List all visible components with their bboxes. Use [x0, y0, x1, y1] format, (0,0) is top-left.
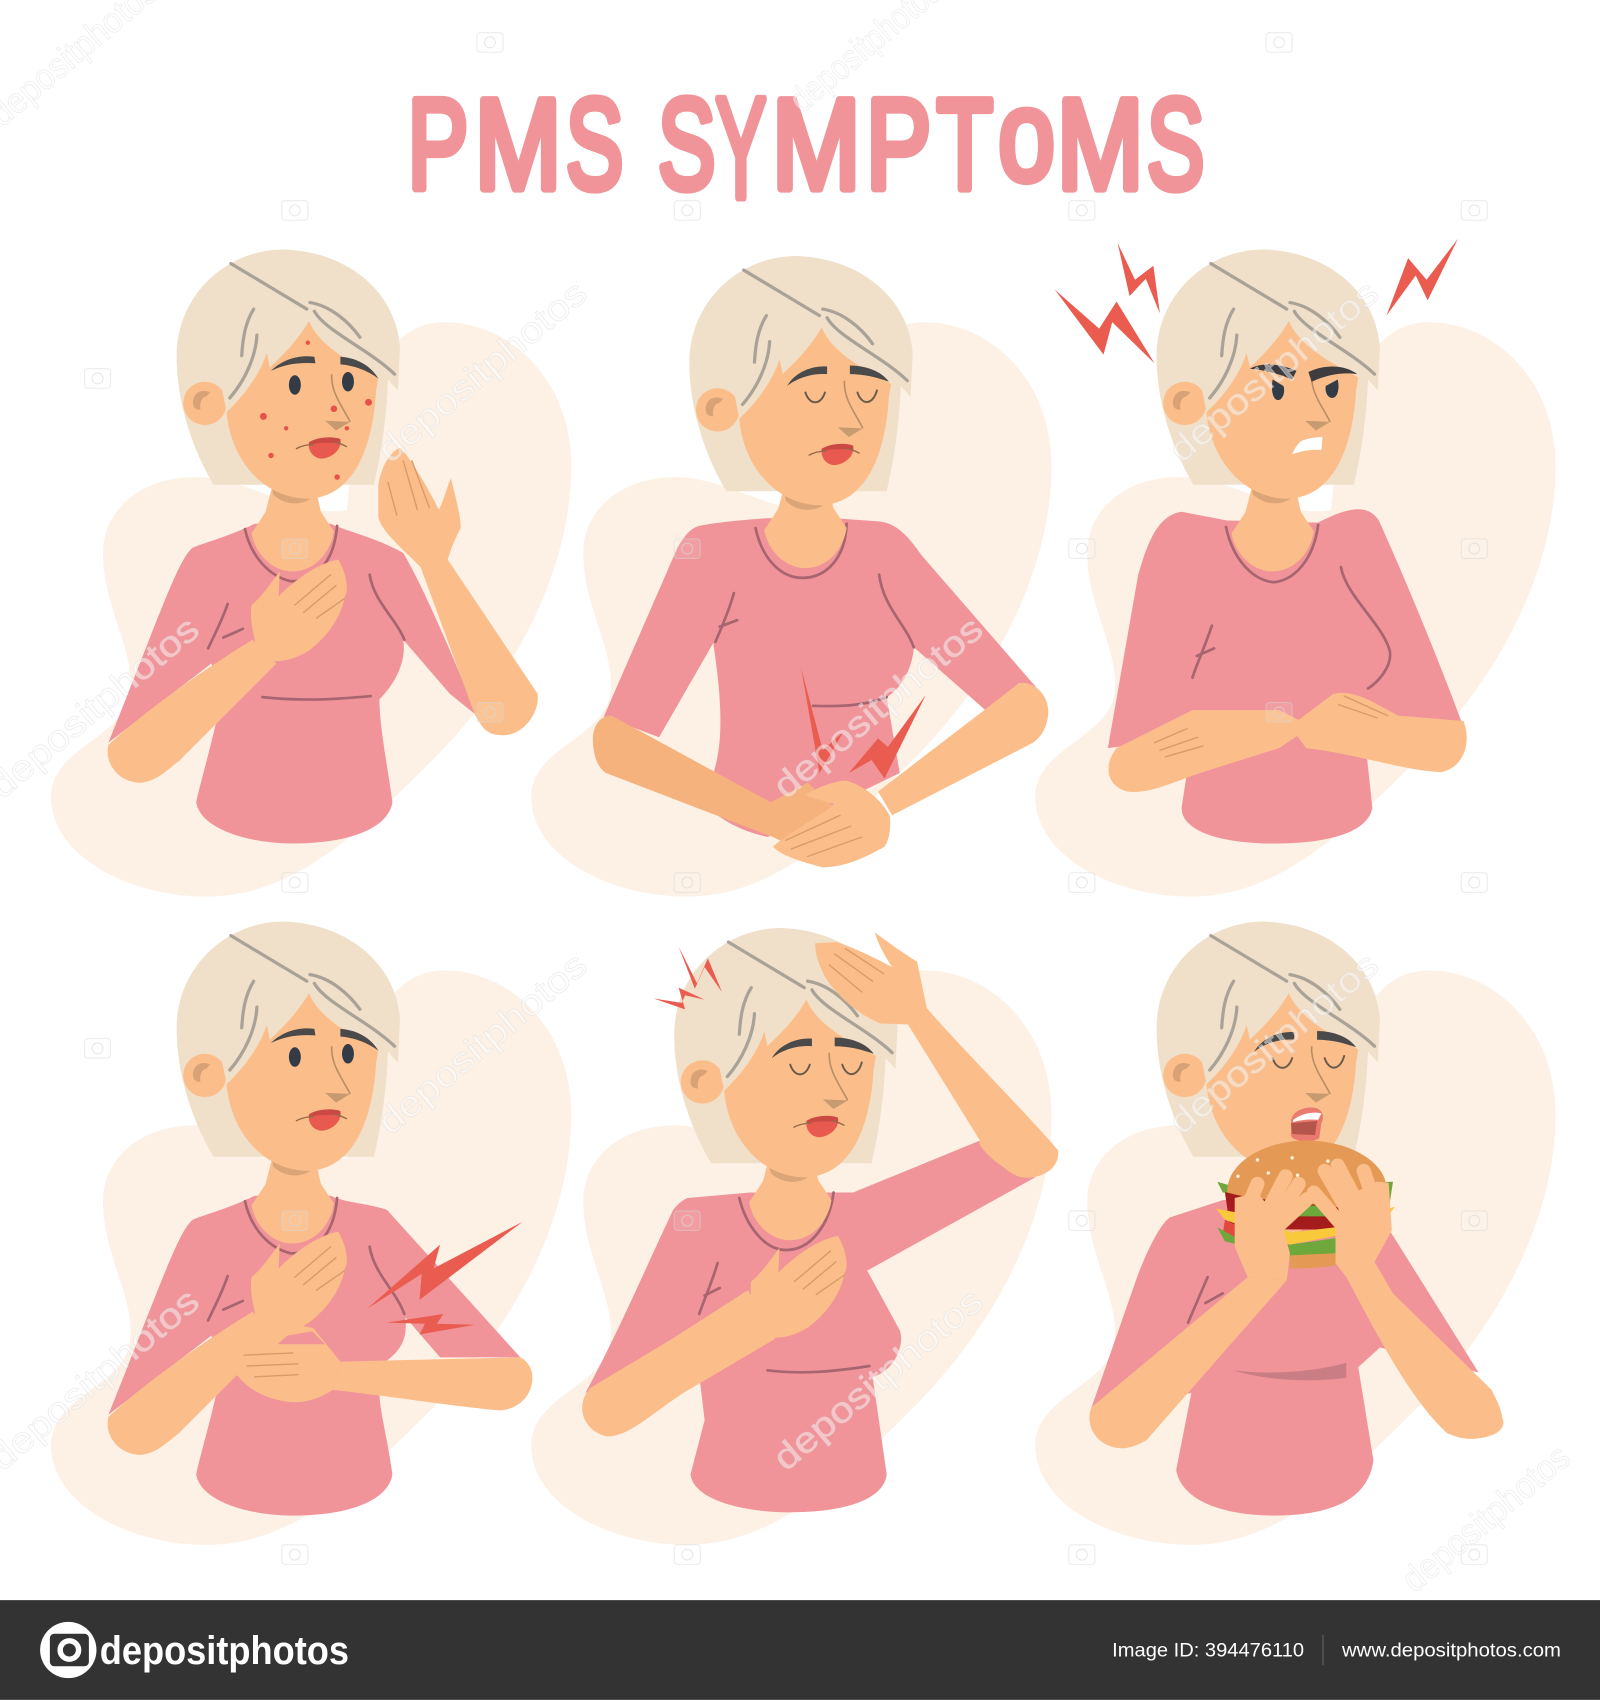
headache bolts — [654, 946, 722, 1009]
shirt lines — [715, 524, 914, 706]
waist shadow — [1234, 1363, 1346, 1380]
right forearm and hand — [1346, 1262, 1503, 1439]
logo text: depositphotos — [100, 1629, 349, 1673]
face — [271, 1028, 378, 1131]
title: P — [408, 74, 468, 217]
cramp bolts — [801, 668, 926, 778]
panel: acne and skin problems — [51, 249, 571, 897]
panel: stomach cramps — [531, 256, 1051, 897]
watermark: depositphotos — [1161, 272, 1386, 470]
watermark cameras — [85, 33, 1487, 1564]
head — [1157, 249, 1380, 503]
shirt lines — [208, 1198, 404, 1320]
clasped hands — [771, 781, 890, 867]
watermark: depositphotos — [1161, 944, 1386, 1142]
shirt lines — [208, 526, 404, 700]
title: M — [772, 74, 861, 217]
hand on chest — [108, 559, 347, 783]
title: P — [866, 74, 931, 217]
title: M — [1057, 74, 1144, 217]
title — [408, 65, 1204, 228]
panel: breast tenderness — [51, 922, 571, 1545]
panel: food cravings — [1035, 922, 1556, 1545]
watermark: depositphotos — [370, 944, 595, 1142]
image id: Image ID: 394476110 — [1112, 1640, 1304, 1662]
arms — [593, 716, 797, 837]
torso — [108, 1196, 520, 1516]
face — [772, 1038, 874, 1137]
neck — [764, 479, 847, 568]
title: o — [998, 65, 1055, 208]
left forearm and hand — [1089, 1277, 1287, 1448]
title: Y — [715, 68, 766, 228]
head — [177, 922, 400, 1175]
face eating — [1254, 1031, 1356, 1141]
torso — [1092, 1193, 1479, 1516]
logo icon: camera — [40, 1622, 96, 1678]
panel: irritability — [1035, 239, 1556, 897]
title: M — [475, 74, 562, 217]
watermark: depositphotos — [370, 272, 595, 470]
neck — [1231, 483, 1314, 571]
watermark: depositphotos — [1394, 1437, 1578, 1600]
torso — [1108, 509, 1461, 843]
neck — [1231, 1155, 1314, 1243]
footer bar — [0, 1600, 1600, 1700]
title: S — [1147, 74, 1204, 217]
shirt lines — [1192, 525, 1390, 688]
title: S — [658, 74, 715, 217]
head — [177, 249, 400, 503]
torso — [108, 524, 477, 843]
head — [689, 256, 913, 510]
anger bolts — [1055, 239, 1458, 363]
website: www.depositphotos.com — [1341, 1640, 1561, 1662]
shirt lines — [1188, 1277, 1223, 1323]
neck — [749, 1151, 831, 1240]
torso — [604, 518, 1036, 837]
arm across chest — [333, 1357, 532, 1410]
title: T — [937, 74, 993, 217]
face — [787, 365, 889, 465]
pain bolts — [367, 1222, 522, 1335]
raised arm and hand on forehead — [907, 1008, 1058, 1178]
hands on chest — [108, 1232, 347, 1455]
shirt lines — [699, 1193, 869, 1372]
raised arm and hand — [378, 448, 538, 735]
title: S — [566, 74, 623, 217]
neck — [251, 1155, 334, 1243]
watermark: depositphotos — [765, 608, 990, 806]
acne dots — [260, 341, 372, 480]
angry face — [1250, 364, 1357, 454]
burger — [1216, 1141, 1395, 1268]
panel: headache — [531, 928, 1058, 1545]
torso — [585, 1141, 1035, 1512]
arms crossed — [1108, 710, 1312, 792]
head — [1157, 922, 1380, 1175]
chest hand — [582, 1290, 775, 1436]
head — [674, 928, 898, 1182]
watermark: depositphotos — [765, 1280, 990, 1478]
face — [271, 356, 378, 459]
neck — [251, 483, 334, 571]
